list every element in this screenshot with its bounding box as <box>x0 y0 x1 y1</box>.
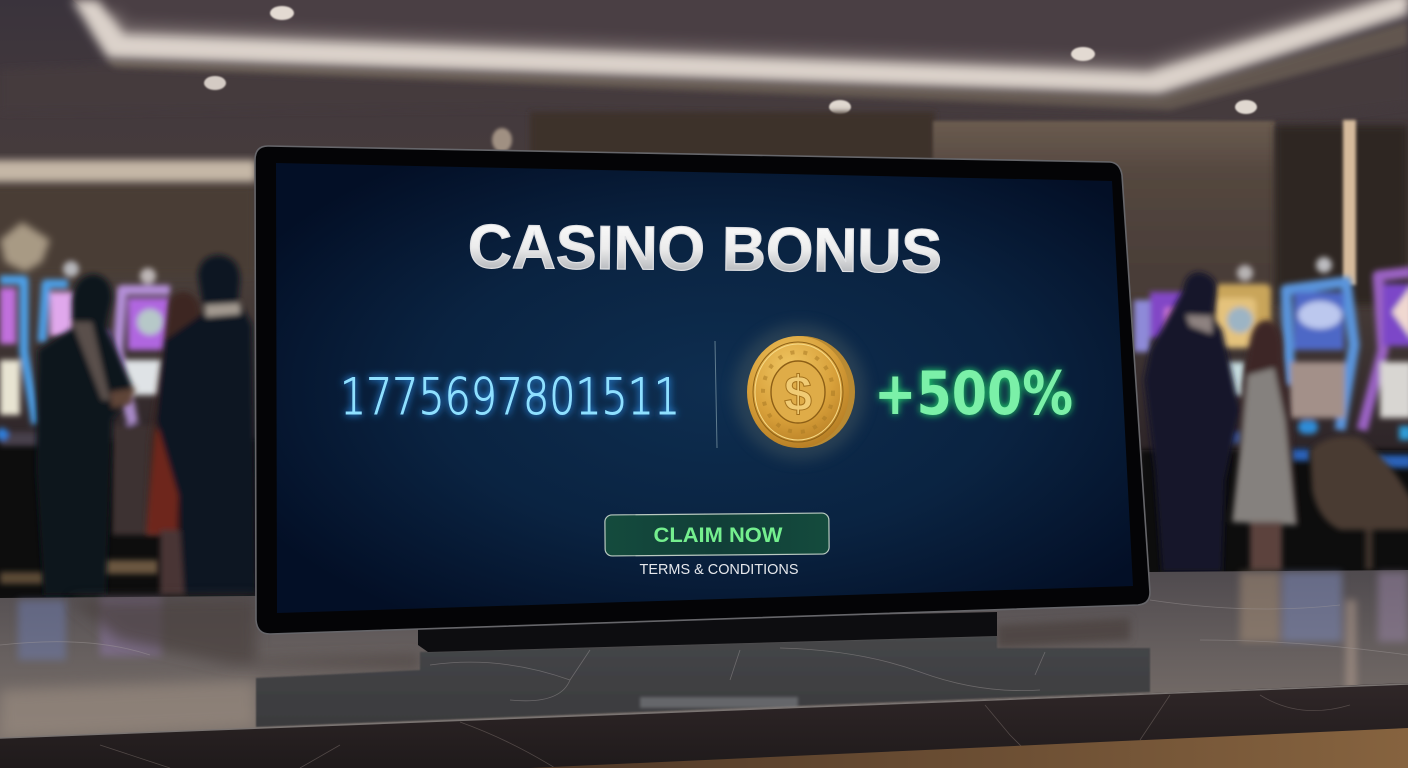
divider line <box>715 341 717 448</box>
left slot machines <box>0 261 170 584</box>
ceiling <box>0 0 1408 125</box>
counter coloured light reflections <box>18 572 1408 690</box>
ceiling cove light <box>72 0 1408 110</box>
counter front edge <box>0 683 1408 768</box>
person: man right <box>156 255 256 595</box>
dark floor band <box>0 440 256 600</box>
terms link: TERMS & CONDITIONS <box>640 561 798 578</box>
claim button: CLAIM NOW <box>654 524 783 547</box>
background: casino room <box>0 0 1408 600</box>
wall light bands <box>0 120 1356 285</box>
pendant lamp <box>0 222 50 272</box>
person: man left <box>36 274 134 595</box>
monitor <box>255 146 1150 634</box>
bonus percentage: +500% <box>874 359 1073 429</box>
marble veins <box>0 600 1408 701</box>
monitor stand <box>418 612 997 652</box>
people left <box>36 255 256 595</box>
person: man in suit <box>1144 272 1240 572</box>
bonus percentage: +500% <box>874 359 1073 429</box>
screen <box>276 163 1133 613</box>
people right <box>1144 272 1408 572</box>
chair <box>1310 436 1408 530</box>
monitor shadow on counter <box>70 598 420 668</box>
title: CASINO BONUS <box>468 213 942 286</box>
icon: gold coin <box>734 324 866 460</box>
monitor bezel <box>255 146 1150 634</box>
wall panels <box>0 112 1408 305</box>
code number: 1775697801511 <box>340 368 680 426</box>
ceiling spotlights <box>204 6 1257 114</box>
reflected text <box>640 697 798 708</box>
claim button <box>605 513 829 556</box>
right slot machines <box>1134 257 1408 468</box>
icon: gold coin: $ <box>784 366 812 422</box>
code number: 1775697801511 <box>340 368 680 426</box>
marble counter <box>0 570 1408 768</box>
person: woman in red <box>146 292 200 530</box>
wood base <box>530 728 1408 768</box>
monitor reflection <box>256 636 1150 727</box>
person: woman in dress <box>1232 320 1298 525</box>
counter warm highlight <box>0 680 256 738</box>
